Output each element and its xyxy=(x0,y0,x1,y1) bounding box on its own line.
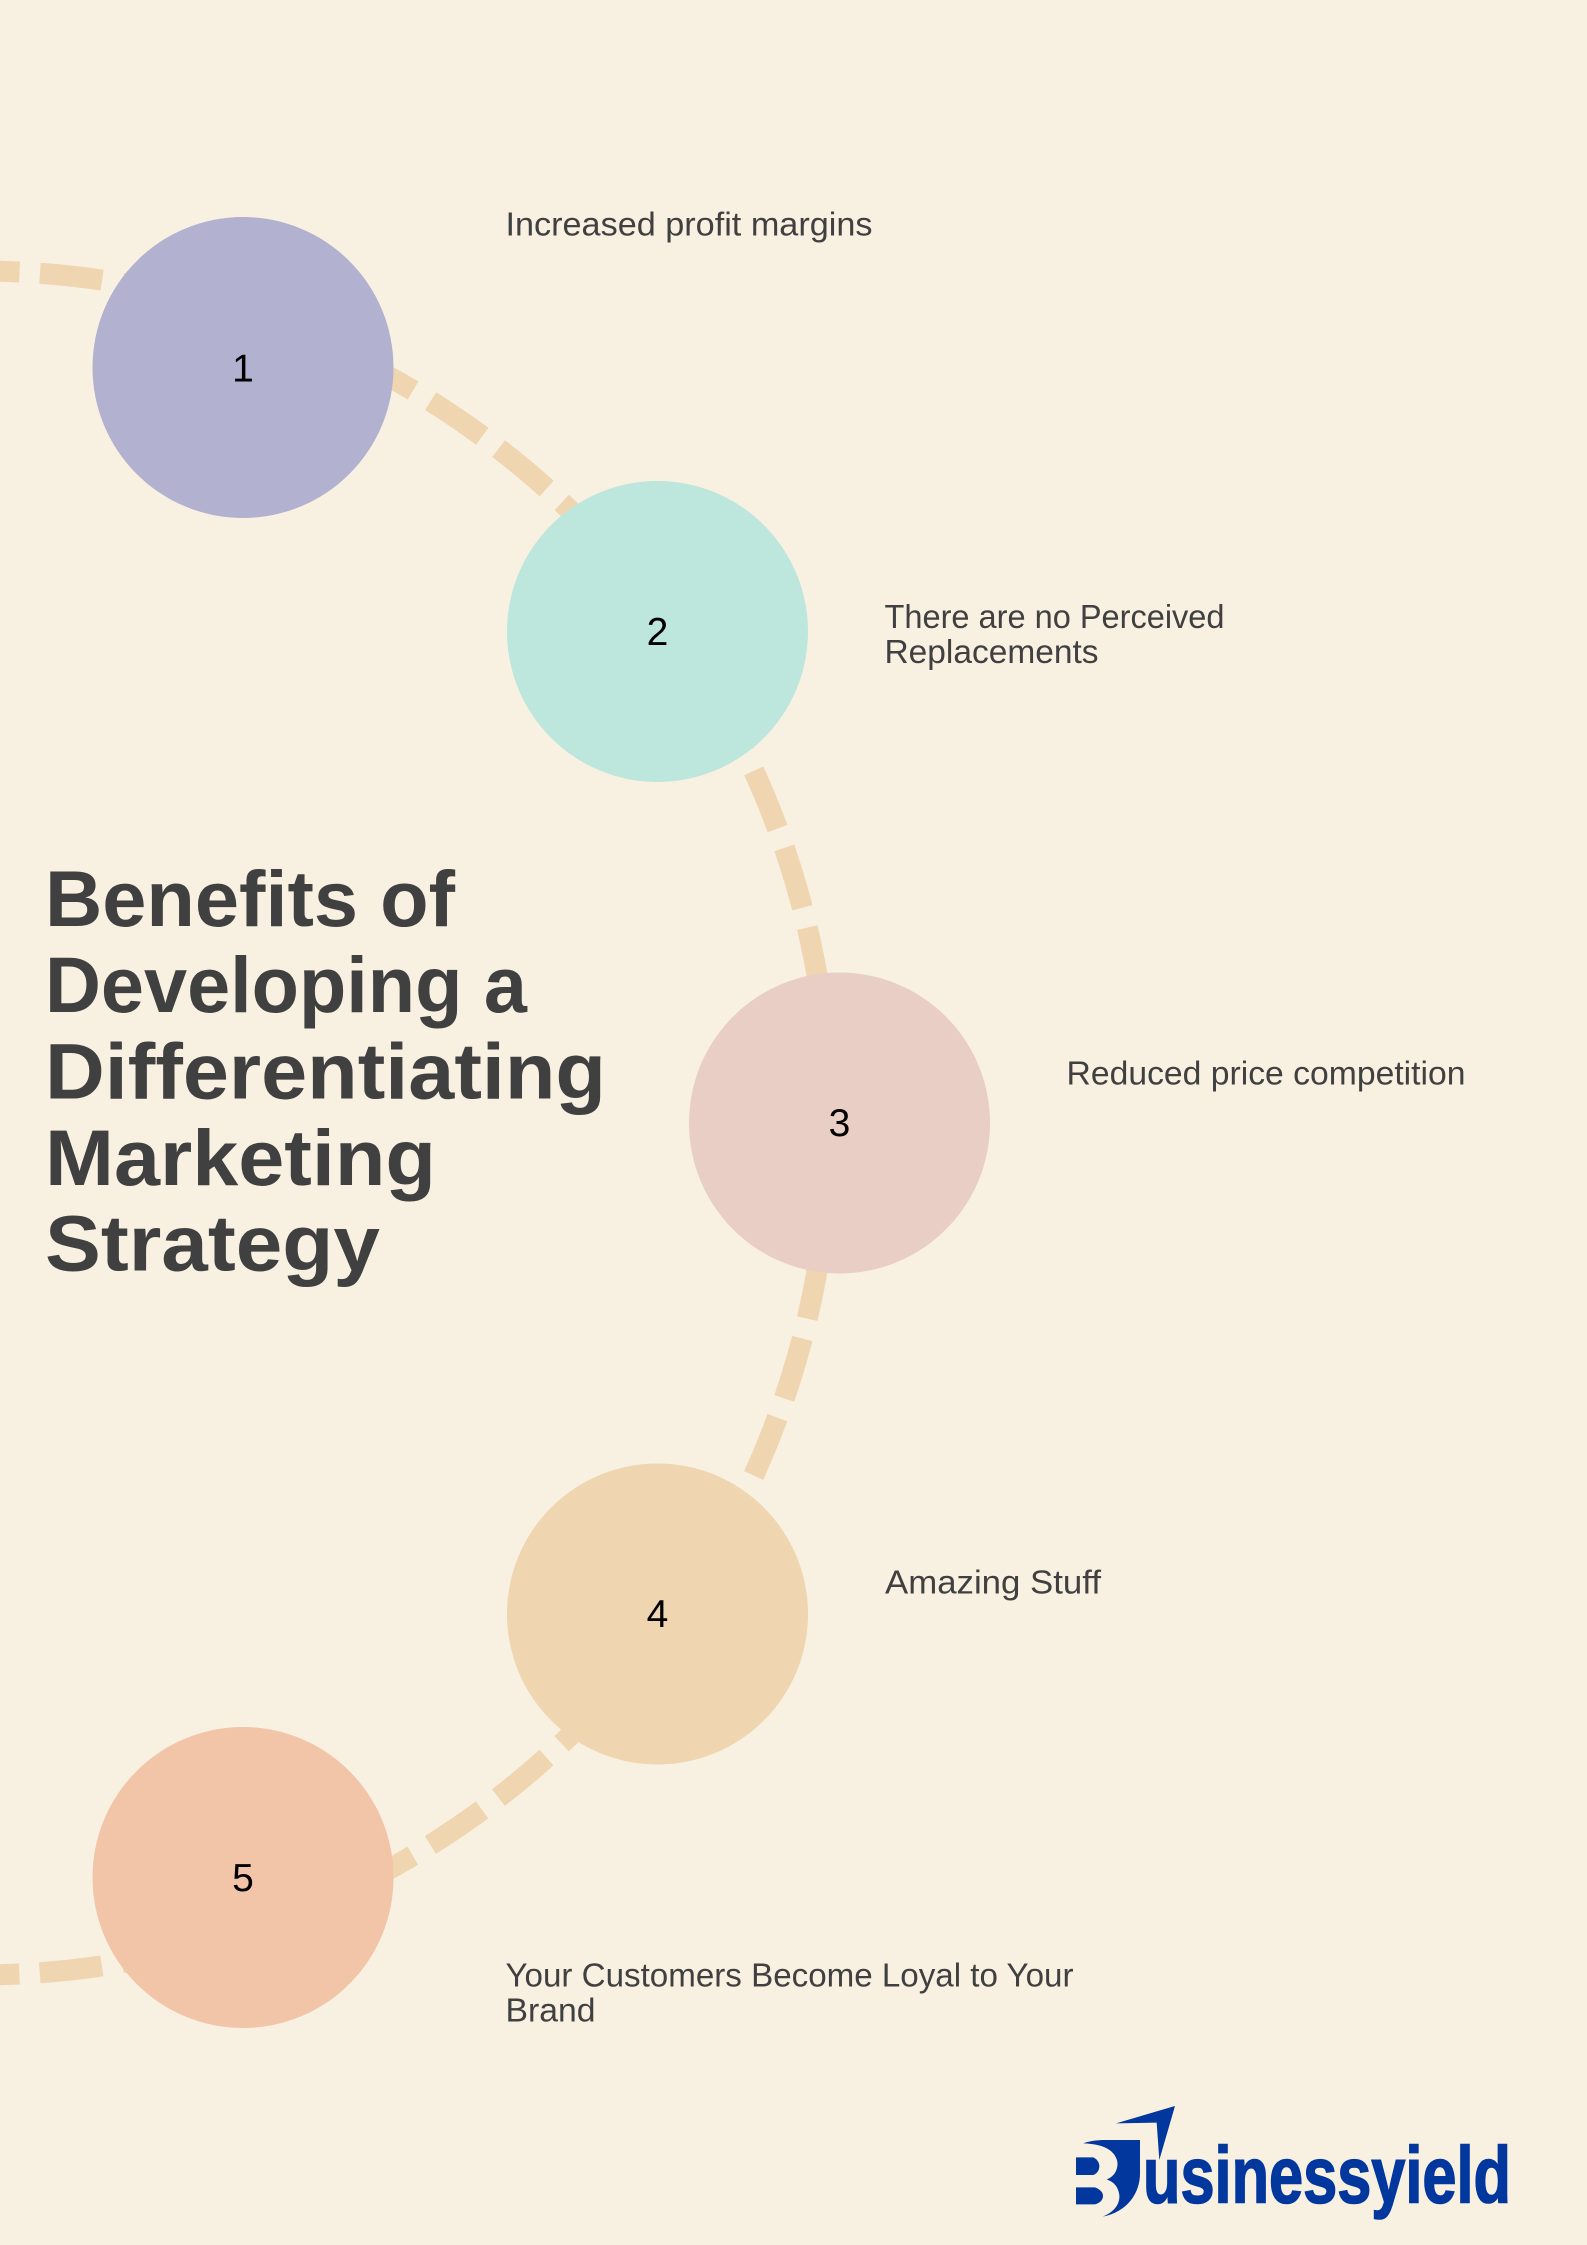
dashed arc connector xyxy=(0,271,830,1975)
circle 5 xyxy=(92,1727,394,2028)
step 3 xyxy=(689,972,990,1274)
title xyxy=(45,854,606,1288)
title: Marketing xyxy=(45,1113,436,1202)
number 1: 1 xyxy=(232,348,254,390)
circle 3 xyxy=(689,972,990,1274)
step 4 text: Amazing Stuff xyxy=(885,1564,1102,1600)
number 5: 5 xyxy=(232,1857,254,1900)
title: Benefits of xyxy=(45,854,456,943)
title: Differentiating xyxy=(45,1026,606,1116)
step 5 text: Brand xyxy=(506,1991,596,2028)
step 5 text xyxy=(506,1957,1074,2028)
step 4 xyxy=(507,1464,808,1764)
step 5 text: Your Customers Become Loyal to Your xyxy=(506,1957,1074,1994)
logo icon: B with arrow xyxy=(1076,2106,1175,2217)
step 2 text: Replacements xyxy=(884,633,1098,670)
step 2 text xyxy=(884,598,1224,670)
number 3: 3 xyxy=(829,1102,850,1145)
step 3 text: Reduced price competition xyxy=(1066,1054,1466,1092)
logo: Businessyield xyxy=(1076,2106,1511,2220)
step 1 text: Increased profit margins xyxy=(506,206,872,243)
title: Developing a xyxy=(45,940,528,1029)
step 2 text: There are no Perceived xyxy=(884,598,1224,635)
number 4: 4 xyxy=(647,1593,668,1636)
number 2: 2 xyxy=(647,611,668,654)
step 5 xyxy=(92,1727,394,2028)
step 2 xyxy=(507,481,808,782)
circle 2 xyxy=(507,481,808,782)
circle 4 xyxy=(507,1464,808,1764)
circle 1 xyxy=(92,217,394,518)
step 1 xyxy=(92,217,394,518)
title: Strategy xyxy=(45,1198,380,1288)
